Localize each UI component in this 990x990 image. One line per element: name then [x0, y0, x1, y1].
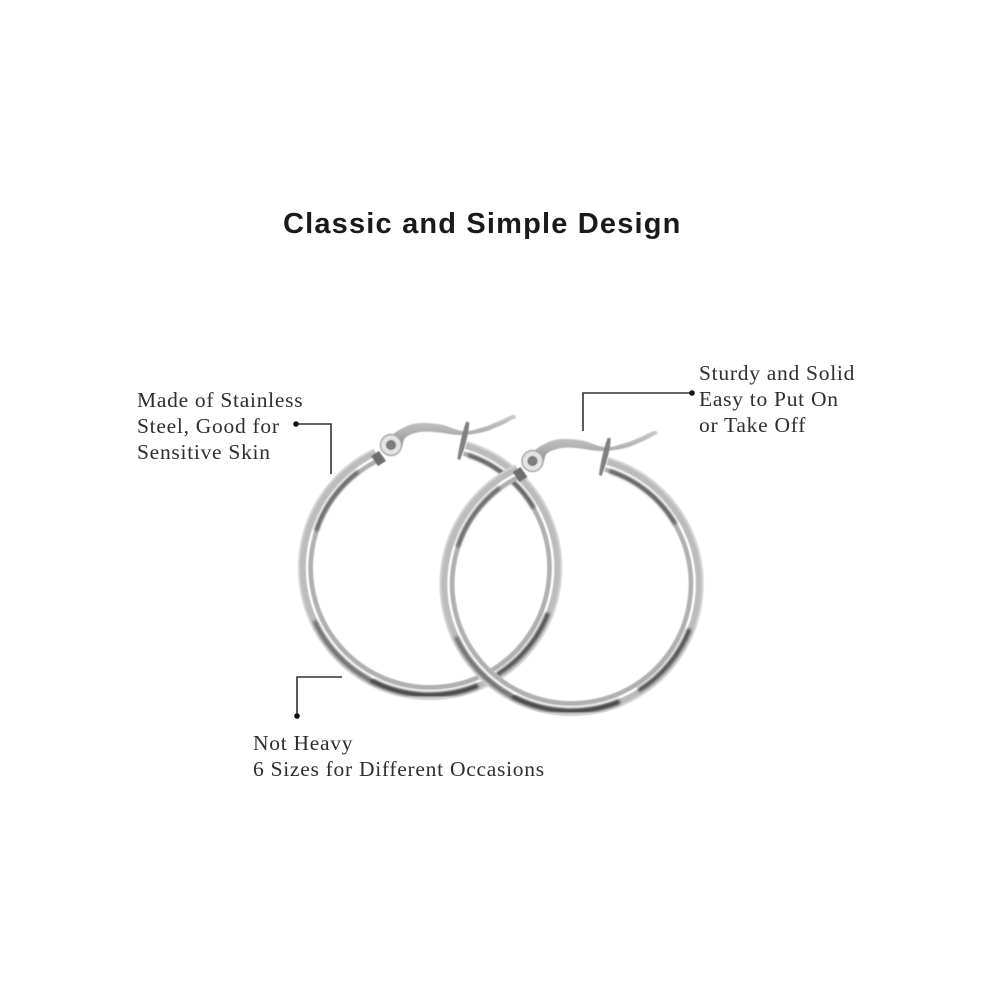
callout: sturdy and solid: or Take Off — [699, 413, 806, 437]
callout: stainless steel — [137, 388, 331, 474]
callout: not heavy — [253, 677, 545, 781]
callout: sturdy and solid: Easy to Put On — [699, 387, 839, 411]
right hoop earring — [440, 431, 702, 715]
callout: not heavy: 6 Sizes for Different Occasions — [253, 757, 545, 781]
callout: stainless steel: Made of Stainless — [137, 388, 303, 412]
callout: sturdy and solid: Sturdy and Solid — [699, 361, 855, 385]
left hoop earring — [299, 415, 561, 699]
callout: stainless steel: Steel, Good for — [137, 414, 280, 438]
callout: sturdy and solid — [583, 361, 855, 437]
title: Classic and Simple Design — [283, 208, 682, 240]
callout: not heavy: Not Heavy — [253, 731, 353, 755]
callout: stainless steel: Sensitive Skin — [137, 440, 271, 464]
